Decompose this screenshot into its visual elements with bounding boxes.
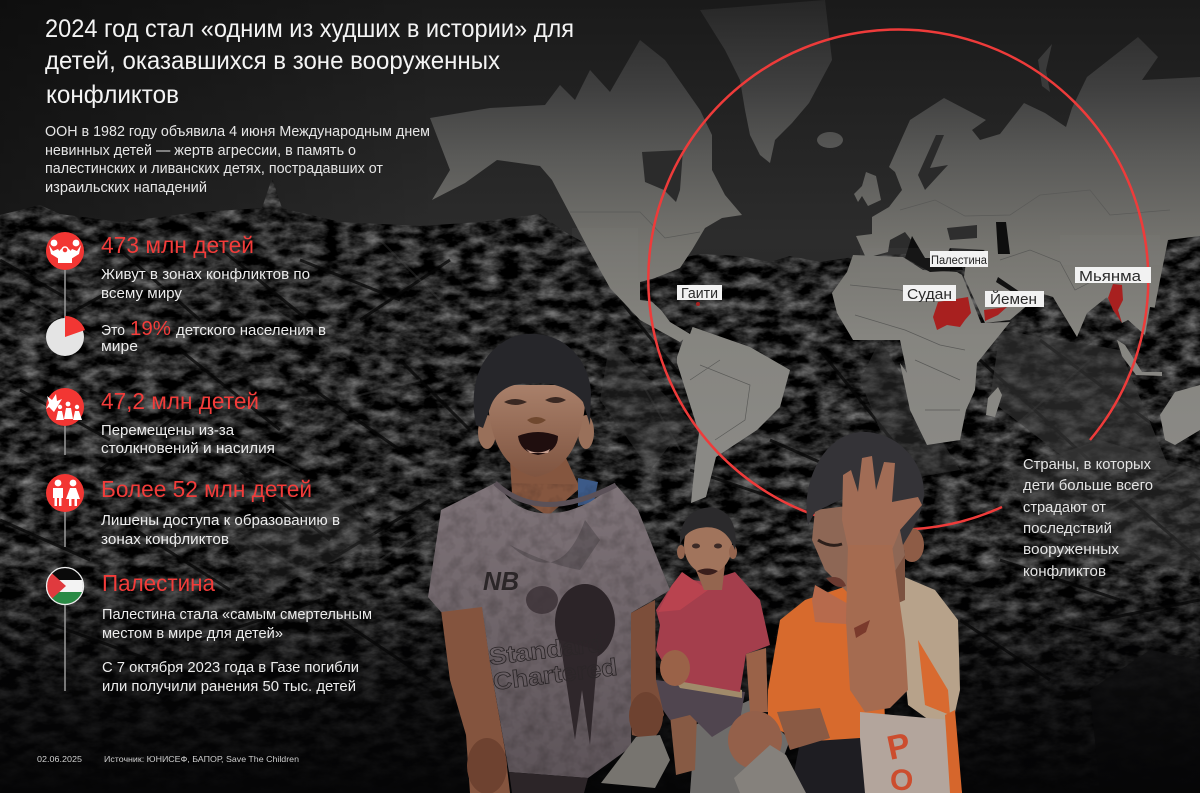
map highlight circle	[648, 30, 1148, 530]
lower torso print	[860, 712, 962, 793]
footer: date and source: Источник: ЮНИСЕФ, БАПОР, Save The Children	[104, 754, 299, 764]
callout: countries where children suffer most: дети больше всего	[1023, 478, 1153, 494]
intro paragraph: палестинских и ливанских детях, пострадавших от	[45, 161, 383, 177]
label: Haiti: Гаити	[681, 285, 718, 302]
face	[812, 500, 905, 600]
photo: right child in orange shirt	[728, 432, 962, 793]
description: всему миру	[101, 286, 183, 302]
text: Это	[101, 323, 125, 339]
hair	[807, 432, 924, 545]
stat: Palestine	[46, 568, 372, 695]
heading: Палестина	[102, 570, 215, 596]
description: Палестина стала «самым смертельным	[102, 607, 372, 623]
collar	[495, 483, 616, 505]
right hand	[629, 692, 663, 740]
callout: countries where children suffer most: страдают от	[1023, 500, 1106, 516]
right arm	[628, 600, 664, 740]
label: Palestine: Палестина	[931, 255, 988, 267]
map: Indonesia	[1117, 340, 1162, 376]
ears	[478, 415, 496, 449]
description	[102, 607, 372, 695]
description: зонах конфликтов	[101, 532, 229, 548]
mouth	[518, 432, 558, 455]
description: Перемещены из-за	[101, 423, 235, 439]
map: Eurasia	[856, 37, 1200, 337]
map: Britain and Ireland	[854, 172, 881, 206]
ear	[900, 528, 924, 562]
callout: countries where children suffer most: Страны, в которых	[1023, 457, 1152, 473]
shirt print: NB	[483, 566, 519, 596]
label: Myanmar	[1075, 267, 1151, 285]
label: Yemen: Йемен	[990, 290, 1037, 308]
stat: 52 million without education	[46, 474, 340, 548]
forearm	[846, 545, 908, 712]
shirt stains	[428, 480, 673, 780]
background: rubble of destroyed buildings	[0, 170, 1200, 793]
shirt	[656, 572, 770, 692]
map: Madagascar	[986, 387, 1002, 417]
neck	[695, 565, 725, 590]
label: Myanmar: Мьянма	[1079, 268, 1142, 285]
label: Sudan: Судан	[907, 286, 952, 303]
bottom fade	[0, 560, 1200, 793]
plastic bag	[601, 735, 670, 788]
intro paragraph: невинных детей — жертв агрессии, в память о	[45, 143, 356, 159]
title: детей, оказавшихся в зоне вооруженных	[45, 47, 500, 75]
hair	[474, 334, 591, 428]
map: Novaya Zemlya	[1038, 44, 1052, 92]
plastic bag	[734, 745, 806, 793]
description: Живут в зонах конфликтов по	[101, 267, 310, 283]
text	[101, 318, 326, 355]
stat: 473 million children	[46, 232, 310, 302]
shirt	[428, 483, 670, 778]
description	[101, 513, 340, 548]
icon: Palestinian flag	[46, 568, 84, 604]
photo: right child in orange shirt: P	[884, 726, 914, 768]
map: North America	[430, 40, 742, 342]
lower hand	[728, 711, 782, 769]
icon: family group	[46, 232, 84, 270]
neck	[510, 458, 580, 516]
callout: countries where children suffer most: вооруженных	[1023, 542, 1120, 558]
blue strap	[578, 478, 598, 506]
map: Iceland	[817, 132, 843, 148]
intro paragraph: ООН в 1982 году объявила 4 июня Международным днем	[45, 124, 430, 140]
stat: 47.2 million displaced	[46, 388, 275, 457]
country: Haiti	[696, 302, 700, 306]
text: мире	[101, 339, 138, 355]
text: детского населения в	[176, 323, 326, 339]
beige sleeve and torso	[895, 573, 960, 735]
description: столкновений и насилия	[101, 441, 275, 457]
heading: 47,2 млн детей	[101, 388, 259, 414]
left arm	[441, 605, 510, 793]
trousers	[509, 772, 588, 793]
legs	[670, 715, 697, 775]
lower forearm	[777, 708, 830, 750]
closed eye and mouth	[818, 540, 842, 545]
eyes	[504, 397, 566, 405]
description	[101, 423, 275, 457]
head	[488, 385, 586, 477]
map: world land masses	[430, 0, 1200, 503]
photo: left child in gray shirt	[428, 334, 673, 793]
neck	[850, 550, 905, 620]
shirt print: Standard	[487, 630, 605, 671]
title: 2024 год стал «одним из худших в истории» для	[45, 15, 574, 43]
stat: 19 percent of child population	[46, 316, 326, 356]
icon: schoolchildren	[46, 474, 84, 512]
description: местом в мире для детей»	[102, 626, 283, 642]
map: Africa	[832, 255, 1010, 445]
nose	[527, 417, 546, 424]
title	[45, 15, 574, 109]
orange trim	[918, 640, 950, 715]
hand	[660, 650, 690, 686]
metal crutch and debris	[690, 700, 790, 793]
callout: countries where children suffer most: последствий	[1023, 521, 1112, 537]
orange shirt	[768, 585, 885, 745]
description	[101, 267, 310, 302]
map: South America	[677, 325, 790, 503]
callout: countries where children suffer most: конфликтов	[1023, 564, 1106, 580]
pie chart: 19%	[46, 316, 85, 356]
map: ghost buildings on land	[572, 228, 1160, 280]
hair	[680, 507, 736, 550]
shirt print: Chartered	[491, 654, 619, 696]
map: Greenland	[700, 0, 832, 163]
footer: date and source: 02.06.2025	[37, 754, 82, 764]
callout: countries where children suffer most	[1023, 457, 1153, 580]
country: Yemen	[984, 307, 1007, 321]
map labels	[677, 251, 1151, 308]
raised hand	[842, 456, 922, 550]
map: Australia	[1160, 385, 1200, 445]
country: Sudan	[933, 297, 971, 330]
photo: middle child in red shirt	[656, 507, 790, 793]
intro paragraph: израильских нападений	[45, 180, 207, 196]
text: 19%	[130, 318, 171, 340]
timeline connector lines	[64, 270, 66, 691]
shorts	[656, 680, 745, 737]
heading: Более 52 млн детей	[101, 476, 312, 502]
description: или получили ранения 50 тыс. детей	[102, 679, 356, 695]
map: inland seas	[642, 135, 1020, 292]
icon: fleeing family	[46, 388, 84, 426]
description: С 7 октября 2023 года в Газе погибли	[102, 660, 359, 676]
intro paragraph	[45, 124, 430, 196]
heading: 473 млн детей	[101, 232, 254, 258]
title: конфликтов	[46, 81, 179, 109]
map: highlighted conflict countries	[696, 284, 1123, 330]
rubble over map edges	[640, 236, 1200, 334]
description: Лишены доступа к образованию в	[101, 513, 340, 529]
country: Myanmar	[1108, 284, 1123, 323]
face features	[697, 568, 718, 575]
map: borders	[570, 190, 1170, 440]
head	[684, 516, 732, 574]
left hand	[467, 738, 507, 793]
far arm	[746, 648, 768, 712]
shirt print	[483, 566, 619, 696]
